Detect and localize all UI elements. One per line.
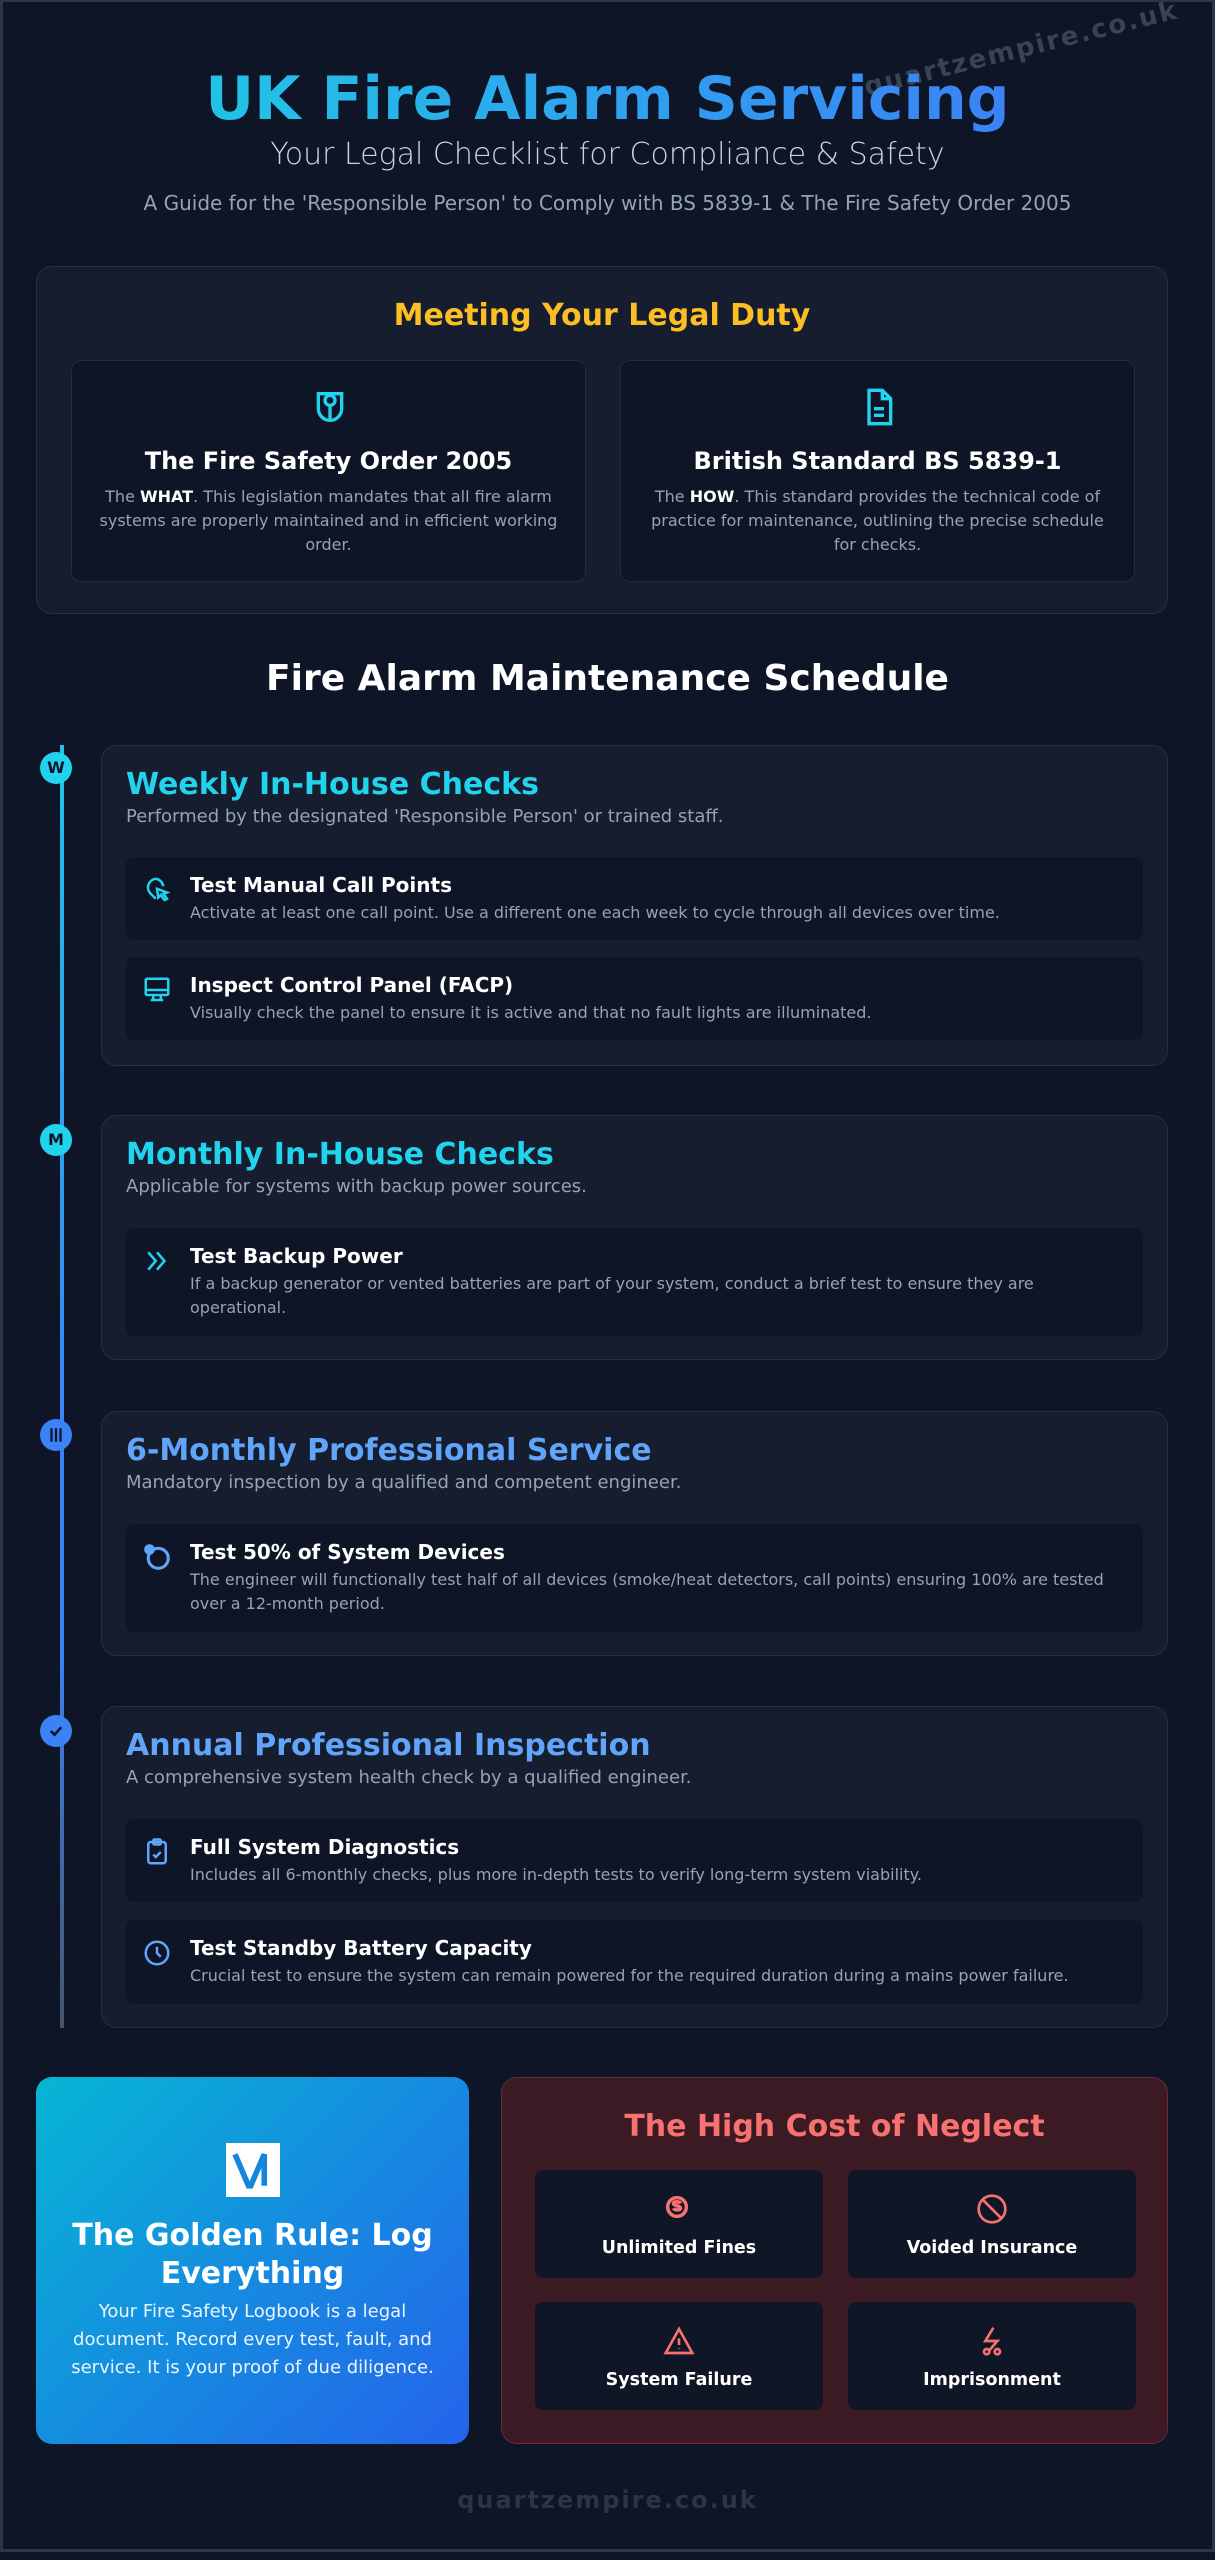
panel: 6-monthly (101, 1411, 1168, 1656)
item: diagnostics: Full System Diagnostics (190, 1835, 459, 1859)
marker: annual (40, 1715, 72, 1747)
heading: British Standard BS 5839-1 (694, 447, 1061, 475)
text: Your Fire Safety Logbook is a legal document. Record every test, fault, and service. It is your proof of due diligence. (71, 2301, 434, 2378)
icon: logbook (226, 2143, 280, 2197)
panel: weekly: Weekly In-House Checks (126, 767, 539, 802)
item: control panel (126, 957, 1143, 1040)
marker: W: W (47, 758, 65, 777)
item: backup power: Test Backup Power (190, 1244, 403, 1268)
tile: failure: System Failure (606, 2370, 752, 2390)
heading: legal duty: Meeting Your Legal Duty (394, 298, 810, 333)
panel: monthly (101, 1115, 1168, 1360)
tile: insurance (848, 2170, 1136, 2278)
item: control panel: Inspect Control Panel (FACP) (190, 973, 513, 997)
card: fire safety order (71, 360, 586, 582)
panel: annual: A comprehensive system health check by a qualified engineer. (126, 1767, 692, 1788)
panel: legal duty (36, 266, 1168, 614)
tile: insurance: Voided Insurance (907, 2238, 1077, 2258)
item: control panel: Visually check the panel to ensure it is active and that no fault lights are illuminated. (190, 1003, 872, 1022)
panel: 6-monthly: Mandatory inspection by a qualified and competent engineer. (126, 1472, 681, 1493)
item: diagnostics: Includes all 6-monthly checks, plus more in-depth tests to verify long-term system viability. (190, 1865, 922, 1884)
panel: annual (101, 1706, 1168, 2028)
timeline line (60, 745, 64, 2028)
heading: The High Cost of Neglect (624, 2109, 1045, 2144)
panel: golden rule (36, 2077, 469, 2444)
marker: W (40, 752, 72, 784)
item: call points: Test Manual Call Points (190, 873, 452, 897)
item: call points (126, 857, 1143, 940)
panel: 6-monthly: 6-Monthly Professional Service (126, 1433, 652, 1468)
item: 50% devices: The engineer will functionally test half of all devices (smoke/heat detectors, call points) ensuring 100% are tested over a 12-month period. (190, 1570, 1104, 1613)
item: battery: Test Standby Battery Capacity (190, 1936, 532, 1960)
panel: cost of neglect (501, 2077, 1168, 2444)
heading: The Golden Rule: Log Everything (72, 2218, 433, 2291)
item: 50% devices: Test 50% of System Devices (190, 1540, 505, 1564)
item: backup power: If a backup generator or vented batteries are part of your system, conduct a brief test to ensure they are operational. (190, 1274, 1034, 1317)
panel: weekly: Performed by the designated 'Responsible Person' or trained staff. (126, 806, 724, 827)
item: battery (126, 1920, 1143, 2004)
panel: monthly: Applicable for systems with backup power sources. (126, 1176, 587, 1197)
footer: quartzempire.co.uk (457, 2486, 758, 2514)
icon: shield (316, 392, 344, 422)
card: BS 5839-1 (620, 360, 1135, 582)
text: The WHAT. This legislation mandates that all fire alarm systems are properly maintained and in efficient working order. (100, 487, 557, 554)
tile: imprisonment: Imprisonment (923, 2370, 1061, 2390)
marker: M: M (48, 1130, 64, 1149)
icon: document (867, 388, 892, 426)
text: The HOW. This standard provides the technical code of practice for maintenance, outlining the precise schedule for checks. (651, 487, 1104, 554)
item: backup power (126, 1228, 1143, 1336)
panel: monthly: Monthly In-House Checks (126, 1137, 554, 1172)
panel: weekly (101, 745, 1168, 1066)
item: 50% devices (126, 1524, 1143, 1632)
subtitle: Your Legal Checklist for Compliance & Safety (270, 137, 945, 172)
item: diagnostics (126, 1819, 1143, 1902)
heading: The Fire Safety Order 2005 (145, 447, 512, 475)
tile: fines (535, 2170, 823, 2278)
tile: fines: Unlimited Fines (602, 2238, 756, 2258)
guide line: A Guide for the 'Responsible Person' to Comply with BS 5839-1 & The Fire Safety Order 2005 (144, 191, 1071, 215)
title: UK Fire Alarm Servicing (205, 64, 1010, 134)
item: battery: Crucial test to ensure the system can remain powered for the required duration during a mains power failure. (190, 1966, 1069, 1985)
item: call points: Activate at least one call point. Use a different one each week to cycle through all devices over time. (190, 903, 1000, 922)
marker: 6-monthly (40, 1419, 72, 1451)
tile: failure (535, 2302, 823, 2410)
marker: M (40, 1124, 72, 1156)
tile: imprisonment (848, 2302, 1136, 2410)
panel: annual: Annual Professional Inspection (126, 1728, 651, 1763)
heading: schedule: Fire Alarm Maintenance Schedule (266, 658, 949, 699)
